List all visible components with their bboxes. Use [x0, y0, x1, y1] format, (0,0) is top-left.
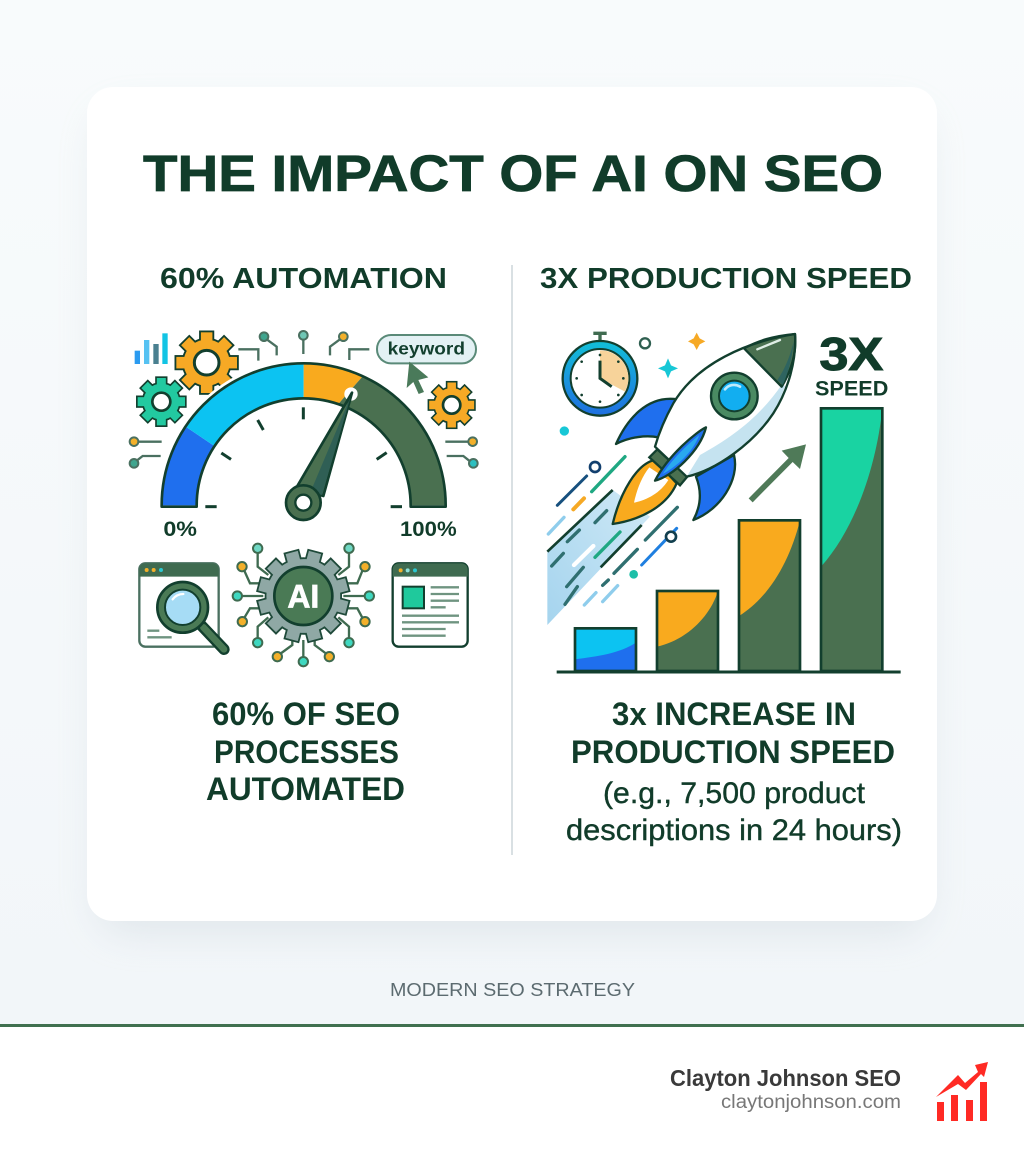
text block: 3x increase in production speed: PRODUCTION SPEED	[571, 734, 895, 770]
bar chart	[557, 408, 901, 672]
rocket nozzle	[649, 449, 687, 485]
text block: 60% of SEO processes automated: 60% OF SEO	[212, 696, 400, 732]
heading: 3x production speed: 3X PRODUCTION SPEED	[540, 263, 912, 295]
text block: 60% of SEO processes automated: PROCESSES	[214, 734, 399, 770]
text block: 3x increase in production speed: descriptions in 24 hours)	[566, 814, 902, 847]
arrow	[749, 444, 806, 502]
title: THE IMPACT OF AI ON SEO	[143, 145, 883, 202]
footer brand name: Clayton Johnson SEO	[670, 1065, 901, 1091]
icon: stopwatch	[563, 333, 637, 416]
text block: 3x increase in production speed	[566, 696, 902, 847]
icon: AI gear with circuits: AI	[287, 578, 319, 614]
divider between columns	[511, 265, 513, 855]
label: 0%: 0%	[163, 518, 197, 541]
rocket body	[655, 334, 795, 481]
text block: 3x increase in production speed: 3x INCREASE IN	[612, 696, 856, 732]
label: 3X speed	[815, 328, 888, 400]
icon: mini bars	[135, 333, 168, 364]
rocket and bars illustration	[547, 328, 901, 672]
icon row: search, AI gear, document	[139, 541, 468, 666]
rocket fins	[616, 399, 735, 520]
caption: modern SEO strategy: MODERN SEO STRATEGY	[390, 980, 635, 1000]
footer URL: claytonjohnson.com	[721, 1092, 901, 1113]
gauge illustration	[130, 331, 478, 541]
footer band	[0, 1024, 1024, 1154]
label: 3X speed: SPEED	[815, 376, 888, 400]
gauge needle	[286, 387, 358, 520]
icon: right orange gear	[429, 382, 474, 427]
icon: teal gear	[138, 378, 185, 425]
icon: cursor	[407, 362, 428, 394]
icon: article browser	[393, 563, 468, 647]
card shadow	[97, 112, 927, 934]
icon: red growth logo	[936, 1062, 988, 1121]
heading: 60% automation: 60% AUTOMATION	[160, 263, 447, 295]
speed trail	[547, 426, 677, 625]
sparkles	[640, 333, 705, 378]
panel: main card	[87, 87, 937, 921]
flame	[613, 460, 677, 524]
label: 100%: 100%	[400, 518, 457, 541]
icon: browser with magnifier	[139, 563, 224, 649]
text block: 3x increase in production speed: (e.g., 7,500 product	[603, 777, 866, 810]
keyword pill: keyword	[388, 339, 465, 359]
gauge tick marks	[205, 407, 402, 507]
text block: 60% of SEO processes automated: AUTOMATED	[206, 771, 405, 807]
label: 3X speed: 3X	[819, 328, 884, 380]
keyword pill	[377, 335, 476, 363]
gauge arc	[162, 363, 446, 507]
text block: 60% of SEO processes automated	[206, 696, 405, 807]
icon: large orange gear	[176, 332, 237, 393]
icon: AI gear with circuits	[233, 541, 374, 666]
circuit lines around gauge	[130, 331, 478, 468]
